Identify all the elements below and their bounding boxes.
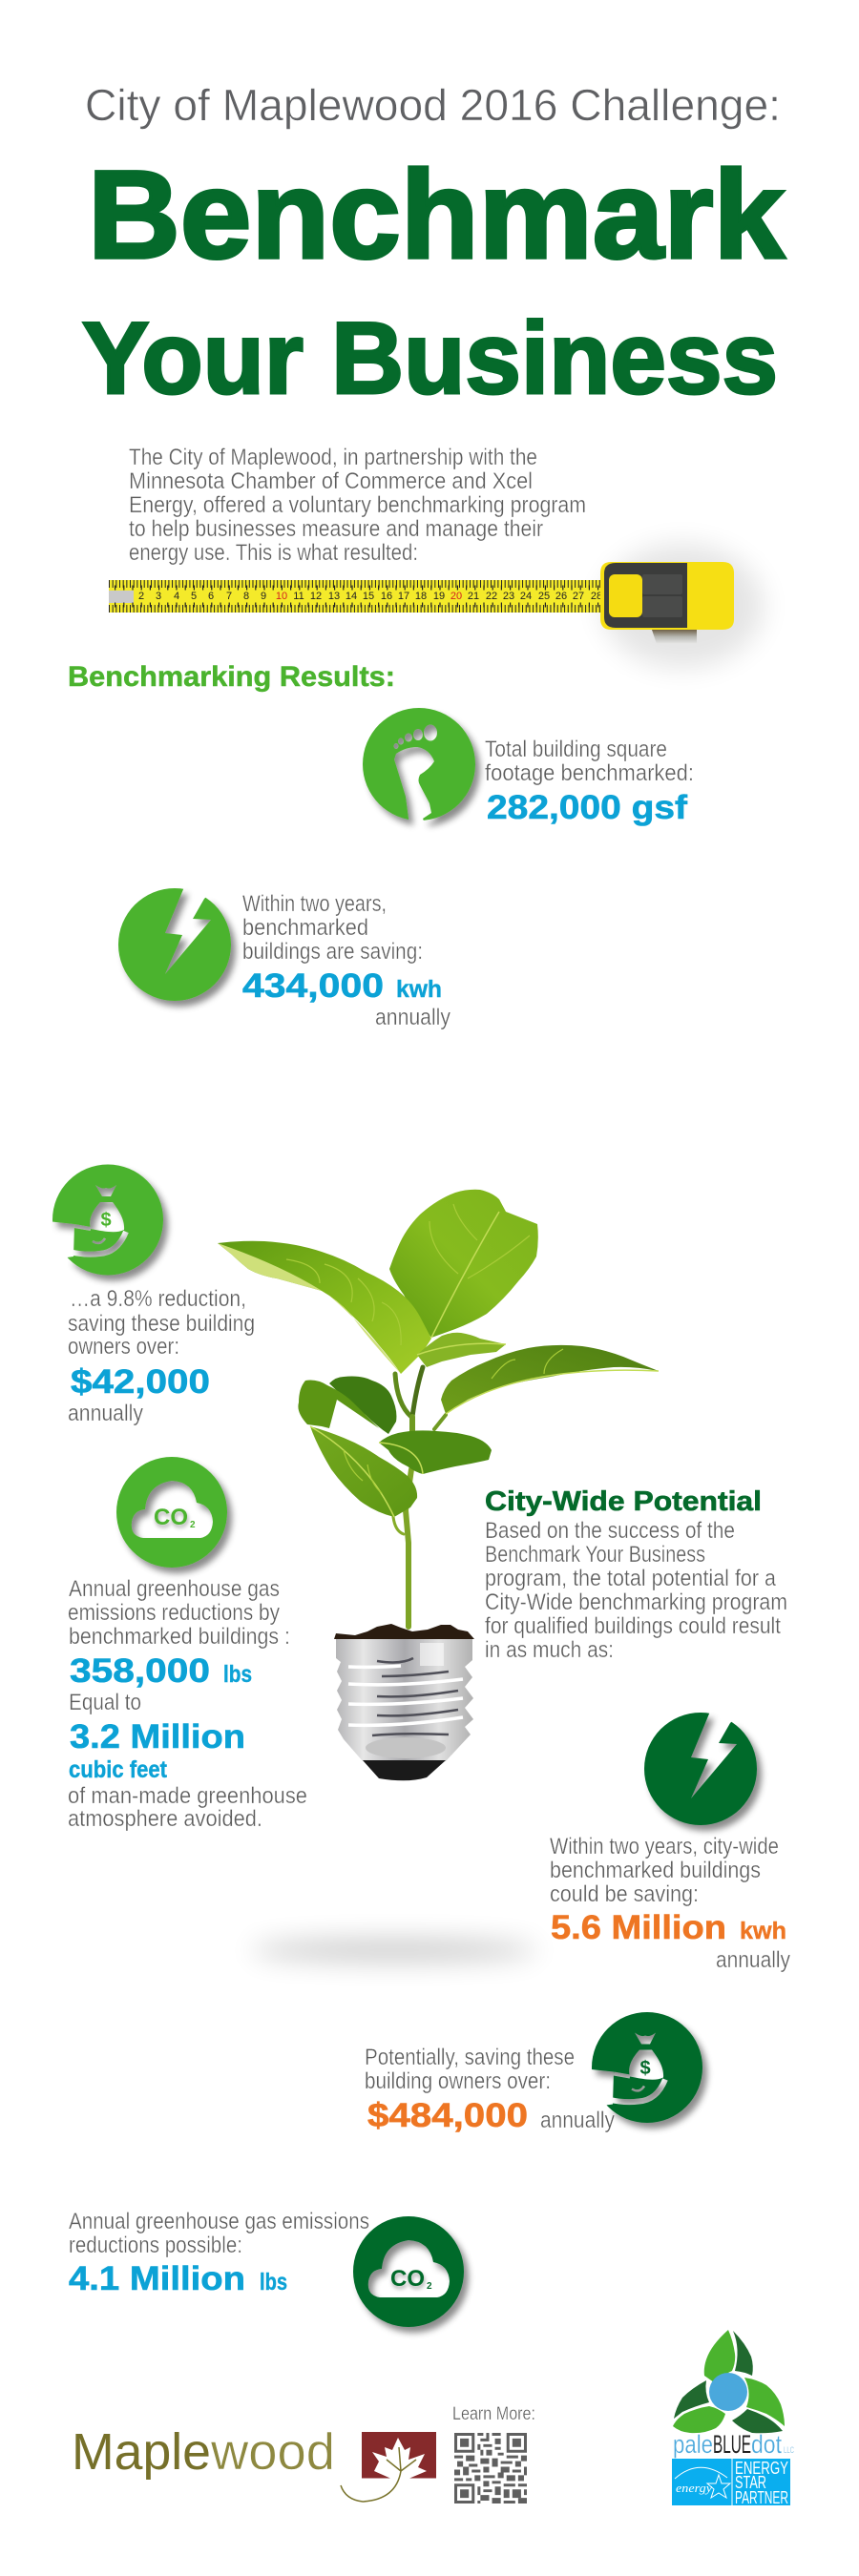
text: city-wide dollars: $484,000 — [367, 2097, 528, 2134]
badge: energy star partner: ENERGY — [735, 2459, 788, 2478]
text: city-wide dollars: building owners over: — [365, 2068, 551, 2094]
QR code with learn more label — [452, 2404, 535, 2503]
intro paragraph: The City of Maplewood, in partnership with the — [129, 445, 537, 470]
text: emissions: of man-made greenhouse — [68, 1783, 307, 1809]
heading: benchmarking results: Benchmarking Results: — [68, 661, 395, 693]
text: dollars: annually — [68, 1401, 143, 1426]
text: city-wide kwh: benchmarked buildings — [550, 1858, 761, 1883]
text: emissions: 3.2 Million — [70, 1718, 245, 1755]
stat: building square footage — [363, 708, 694, 826]
leaves — [218, 1190, 659, 1517]
tape measure illustration: 25 — [538, 591, 550, 602]
intro paragraph: energy use. This is what resulted: — [129, 540, 418, 566]
leaf: upper right — [389, 1190, 538, 1338]
text: dollars: saving these building — [68, 1311, 255, 1337]
stat: city-wide dollars — [365, 2012, 702, 2134]
paragraph: city-wide: program, the total potential for a — [485, 1566, 777, 1591]
paragraph: city-wide — [485, 1518, 787, 1663]
intro paragraph — [129, 445, 586, 566]
text: kwh: 434,000 — [242, 967, 384, 1005]
wordmark: paleBLUEdot: pale — [673, 2430, 713, 2459]
tape measure illustration: 19 — [433, 591, 445, 602]
badge: energy star partner: PARTNER — [735, 2488, 788, 2507]
heading: Your Business: Your Business — [82, 301, 778, 415]
icon: dark CO2 cloud: CO — [390, 2266, 425, 2292]
text: emissions: atmosphere avoided. — [68, 1806, 262, 1832]
logo: paleBLUEdot — [672, 2330, 794, 2507]
tape measure illustration: 2 — [138, 591, 144, 602]
panel: city-wide potential text — [485, 1486, 787, 1663]
badge: energy star partner — [672, 2459, 790, 2507]
wordmark: paleBLUEdot: LLC — [784, 2445, 794, 2455]
text: emissions: Annual greenhouse gas — [69, 1576, 280, 1602]
leaf: centre — [379, 1430, 492, 1474]
tape measure illustration — [109, 544, 764, 668]
tape measure illustration: 3 — [156, 591, 161, 602]
leaf veins — [310, 1212, 659, 1517]
icon: CO2 cloud: 2 — [190, 1520, 196, 1530]
text: emissions: Equal to — [69, 1690, 141, 1715]
paragraph: city-wide: Based on the success of the — [485, 1518, 735, 1544]
intro paragraph: to help businesses measure and manage their — [129, 516, 543, 542]
title block — [82, 80, 785, 415]
text: emissions: cubic feet — [69, 1756, 168, 1783]
tape measure illustration: 27 — [573, 591, 584, 602]
text: kwh: annually — [375, 1005, 450, 1030]
text: dollars: $42,000 — [71, 1363, 210, 1401]
tape measure illustration: 28 — [591, 591, 602, 602]
icon: dark CO2 cloud: 2 — [427, 2281, 432, 2292]
intro paragraph: Energy, offered a voluntary benchmarking program — [129, 492, 586, 518]
illustration: plant growing from light bulb base — [218, 1190, 659, 1961]
badge: energy star partner: energy — [676, 2481, 712, 2495]
icon: money bag in hand — [52, 1164, 163, 1275]
stat: kwh saved — [118, 888, 450, 1030]
text: kwh — [242, 891, 450, 1030]
tape measure illustration: 13 — [328, 591, 340, 602]
paragraph: city-wide: City-Wide benchmarking program — [485, 1589, 787, 1615]
text: square footage: footage benchmarked: — [485, 760, 694, 786]
icon: dark money bag: $ — [639, 2058, 651, 2079]
text: city-wide kwh: Within two years, city-wide — [550, 1834, 779, 1859]
text: dollars: …a 9.8% reduction, — [70, 1286, 246, 1312]
tape measure illustration: 24 — [520, 591, 532, 602]
stat: greenhouse gas reductions — [68, 1457, 307, 1832]
tape measure illustration: 26 — [555, 591, 567, 602]
intro paragraph: Minnesota Chamber of Commerce and Xcel — [129, 468, 533, 494]
text: emissions: emissions reductions by — [68, 1600, 280, 1626]
tape measure illustration: 18 — [415, 591, 427, 602]
wordmark: paleBLUEdot: dot — [751, 2430, 782, 2459]
icon: footprint — [363, 708, 475, 821]
wordmark: paleBLUEdot: BLUE — [713, 2430, 751, 2459]
tape measure illustration: 22 — [486, 591, 497, 602]
text: dollars: owners over: — [68, 1334, 179, 1360]
heading: city-wide potential: City-Wide Potential — [485, 1486, 762, 1517]
tape measure illustration: 17 — [398, 591, 409, 602]
icon: CO2 cloud: CO — [154, 1505, 188, 1530]
wordmark: paleBLUEdot — [673, 2430, 794, 2459]
logo: Maplewood — [72, 2423, 436, 2502]
tape measure illustration: 9 — [261, 591, 266, 602]
tape measure illustration: 14 — [346, 591, 357, 602]
text: city-wide kwh — [550, 1834, 790, 1973]
icon: dark CO2 cloud — [353, 2216, 464, 2327]
paragraph: city-wide: for qualified buildings could result — [485, 1613, 781, 1639]
text: city-wide emissions: Annual greenhouse gas emissions — [69, 2209, 369, 2234]
text: kwh: buildings are saving: — [242, 939, 423, 965]
stat: dollars saved — [52, 1164, 255, 1426]
text: dollars — [68, 1286, 255, 1426]
tape measure illustration: 8 — [243, 591, 249, 602]
icon: money bag in hand: $ — [100, 1210, 112, 1231]
text: kwh: kwh — [396, 976, 442, 1003]
stat: city-wide kwh — [550, 1713, 790, 1973]
text: emissions: benchmarked buildings : — [69, 1624, 290, 1650]
tape measure illustration: 21 — [468, 591, 479, 602]
ground shadow — [251, 1940, 537, 1961]
icon: dark lightning bolt — [644, 1713, 757, 1825]
tape measure illustration: 4 — [174, 591, 179, 602]
text: city-wide dollars: annually — [540, 2108, 615, 2133]
leaf: long right — [441, 1345, 659, 1414]
text: city-wide kwh: 5.6 Million — [551, 1909, 726, 1946]
heading: Benchmark: Benchmark — [88, 144, 785, 284]
heading: challenge line: City of Maplewood 2016 Challenge: — [85, 80, 781, 130]
stems — [393, 1367, 446, 1627]
logo: Maplewood: wood — [210, 2423, 335, 2481]
text: city-wide dollars — [365, 2045, 615, 2134]
icon: lightning bolt — [118, 888, 231, 1001]
icon: CO2 cloud — [116, 1457, 227, 1568]
text: square footage: 282,000 gsf — [487, 789, 687, 826]
paragraph: city-wide: Benchmark Your Business — [485, 1542, 705, 1568]
badge: energy star partner: STAR — [735, 2473, 766, 2492]
text: kwh: benchmarked — [242, 915, 368, 941]
tape measure illustration: 6 — [208, 591, 214, 602]
tape measure illustration: 16 — [381, 591, 392, 602]
text: city-wide kwh: kwh — [740, 1918, 786, 1944]
logo: Maplewood: Maple — [72, 2423, 211, 2481]
tape measure illustration: 23 — [503, 591, 514, 602]
icon: leaf trefoil with blue dot — [673, 2330, 785, 2433]
tape measure illustration: 20 — [450, 591, 462, 602]
text: city-wide dollars: Potentially, saving these — [365, 2045, 575, 2070]
tape measure illustration: 7 — [226, 591, 232, 602]
light bulb base with soil — [334, 1624, 474, 1780]
text: emissions: 358,000 — [70, 1652, 210, 1690]
leaf: upper left large — [218, 1241, 431, 1374]
text: square footage — [485, 737, 694, 826]
leaf: rear dark — [329, 1376, 396, 1434]
text: kwh: Within two years, — [242, 891, 387, 917]
tape measure illustration: 10 — [276, 591, 287, 602]
text: city-wide kwh: could be saving: — [550, 1881, 699, 1907]
text: city-wide emissions: 4.1 Million — [69, 2260, 245, 2297]
paragraph: city-wide: in as much as: — [485, 1637, 614, 1663]
leaf: lower left — [310, 1426, 417, 1517]
icon: dark money bag — [592, 2012, 702, 2123]
tape measure illustration: 5 — [191, 591, 197, 602]
text: city-wide emissions: reductions possible: — [69, 2233, 242, 2258]
text: city-wide emissions — [69, 2209, 369, 2297]
tape measure illustration: 11 — [293, 591, 304, 602]
stat: city-wide emissions — [69, 2209, 464, 2327]
tape measure illustration: 12 — [310, 591, 322, 602]
text: emissions — [68, 1576, 307, 1832]
text: city-wide emissions: lbs — [260, 2269, 287, 2296]
tape measure illustration: 15 — [363, 591, 374, 602]
leaf: small centre — [417, 1333, 506, 1367]
leaf: left curled — [298, 1381, 379, 1428]
QR code with learn more label: Learn More: — [452, 2404, 535, 2424]
text: city-wide kwh: annually — [716, 1947, 790, 1973]
text: emissions: lbs — [223, 1661, 252, 1688]
text: square footage: Total building square — [485, 737, 667, 762]
